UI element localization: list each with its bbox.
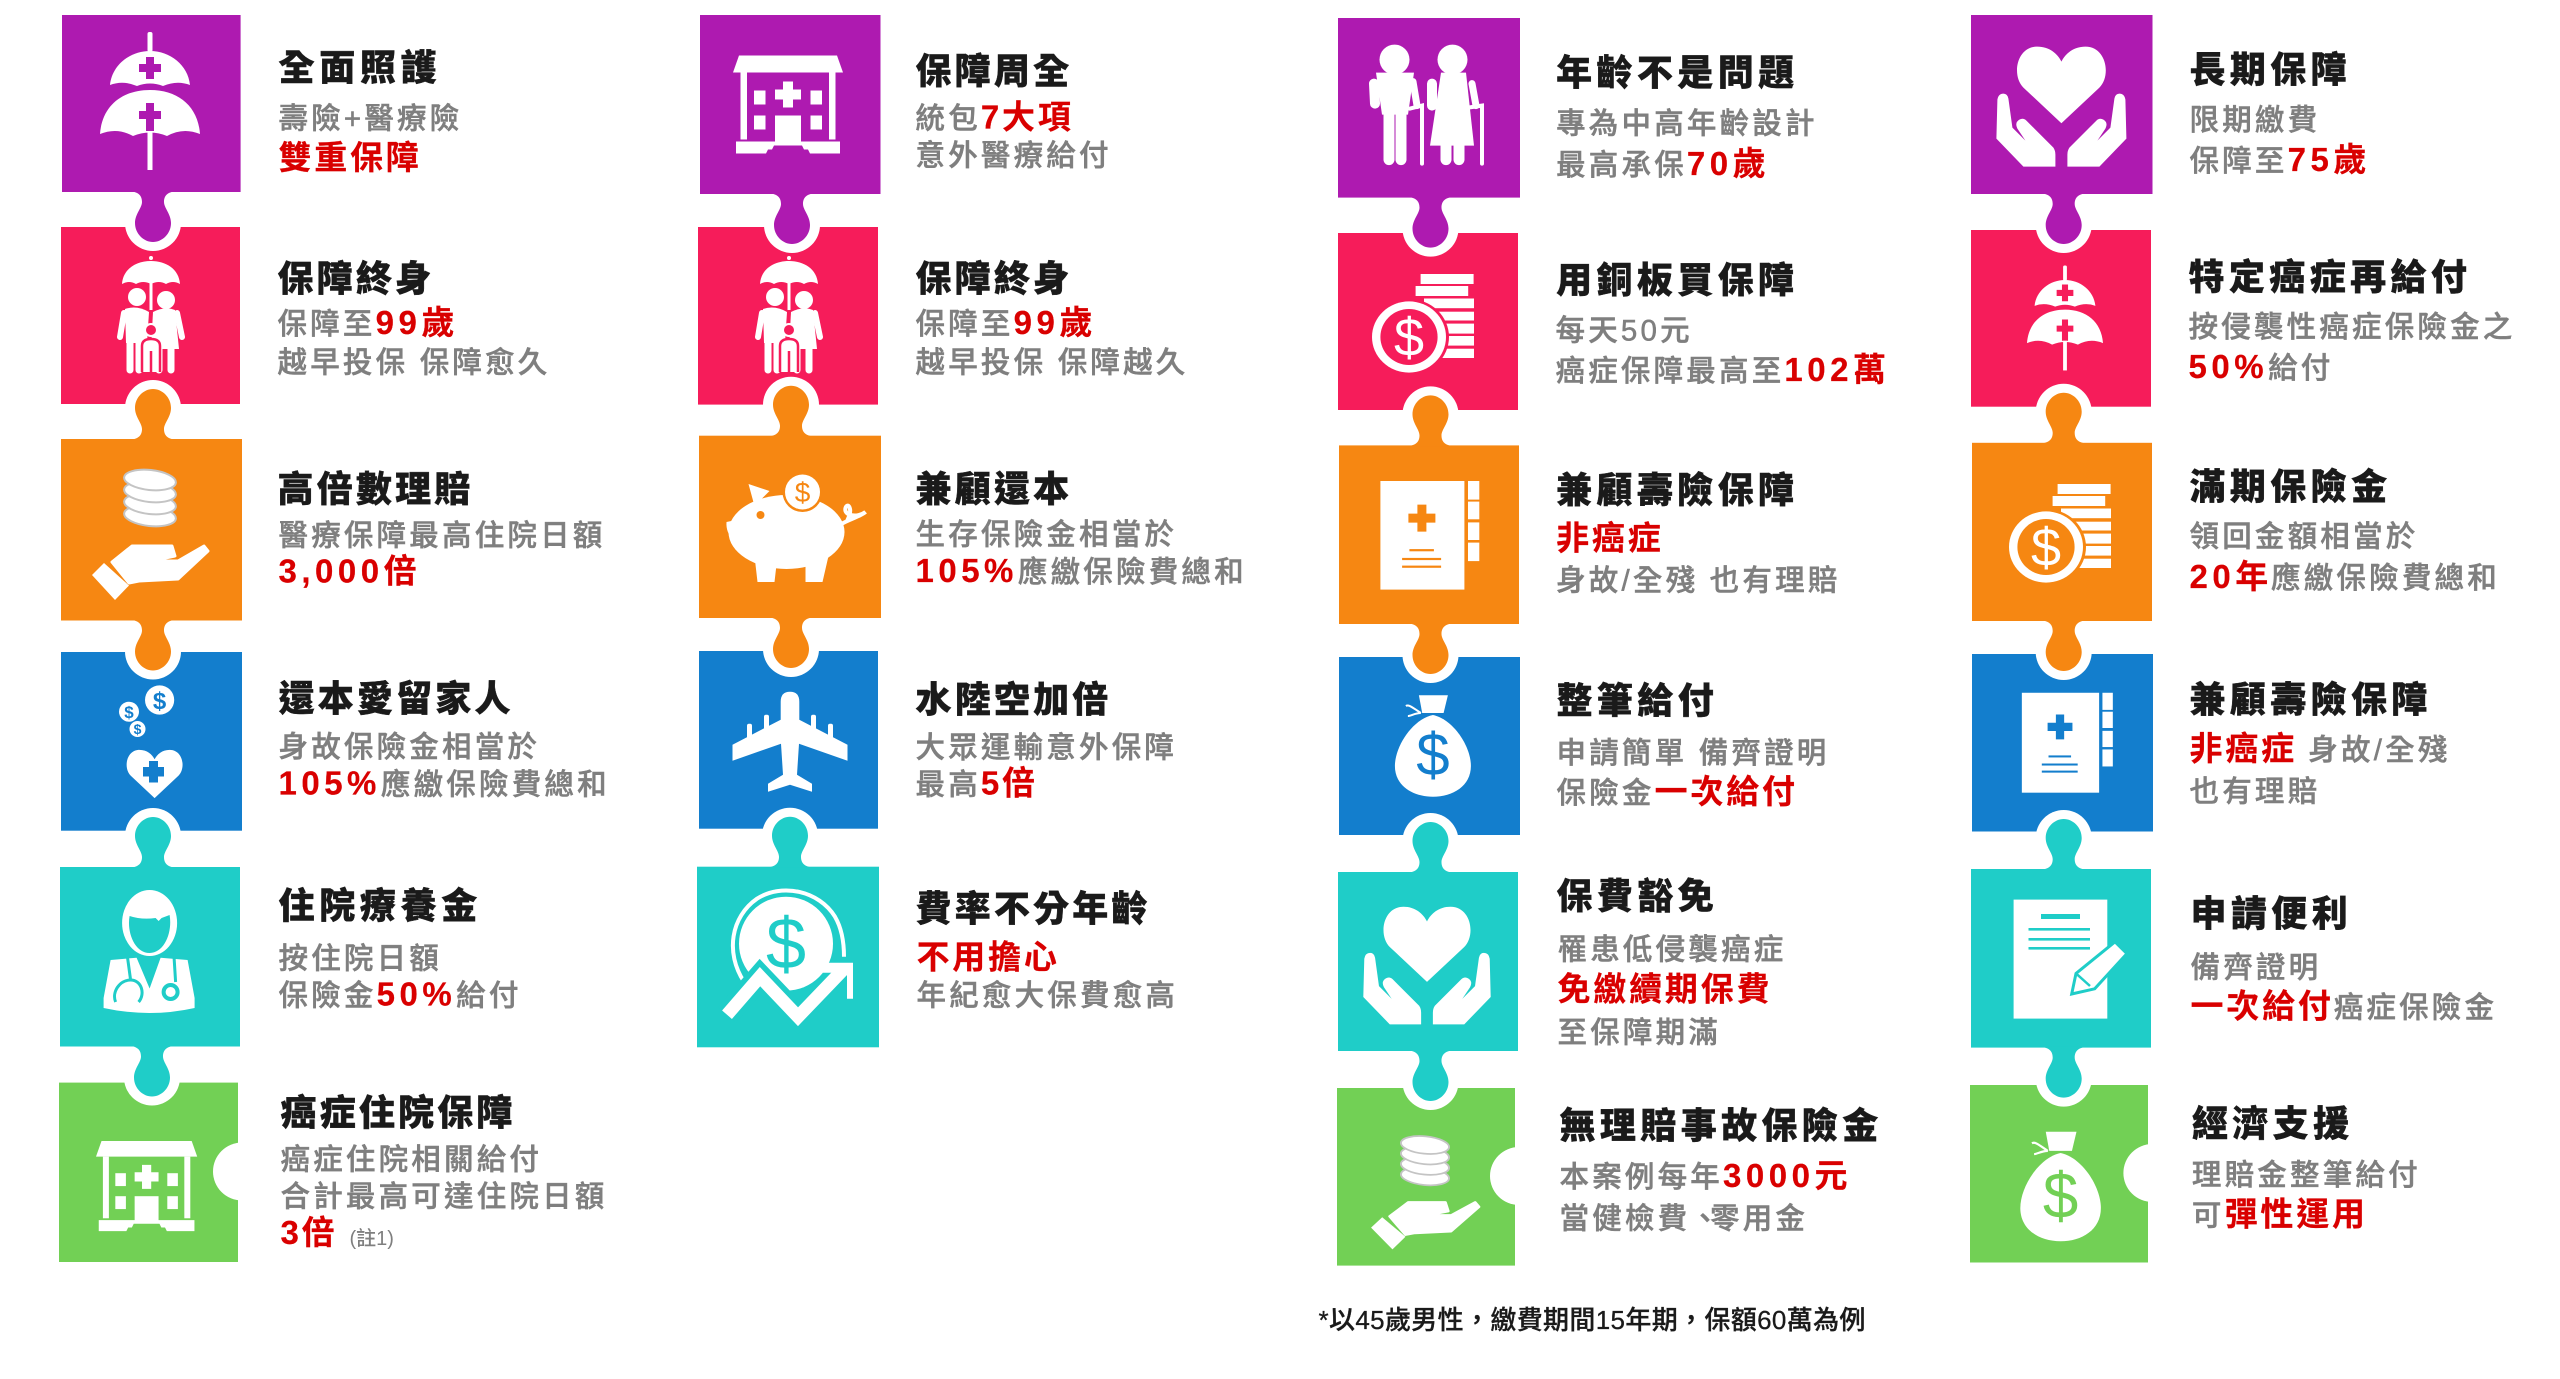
panel: 申請便利: [1971, 869, 2497, 1048]
tile: [1339, 657, 1520, 835]
text block: [278, 304, 550, 380]
tile: [697, 867, 879, 1047]
connector: teal tab up: [1402, 813, 1458, 873]
text block: 保障至99歲: [916, 304, 1095, 341]
icon: hospital: [733, 56, 843, 154]
text block: [2188, 311, 2516, 385]
text block: 保險金50%給付: [278, 976, 522, 1012]
connector: teal tab down: [1402, 1050, 1458, 1110]
heading: 特定癌症再給付: [2188, 256, 2471, 297]
connector: purple tab: [1402, 197, 1458, 257]
connector: purple tab: [764, 193, 820, 253]
heading: 兼顧還本: [916, 469, 1072, 510]
text block: 年紀愈大保費愈高: [916, 980, 1178, 1012]
notch: [1490, 1147, 1548, 1205]
heading: 整筆給付: [1556, 680, 1718, 721]
text block: 限期繳費: [2190, 104, 2320, 137]
panel: 住院療養金: [60, 867, 522, 1046]
text block: (註1): [350, 1227, 394, 1250]
text block: 備齊證明: [2190, 952, 2321, 984]
text block: 105%應繳保險費總和: [278, 764, 610, 802]
tile: [1972, 654, 2153, 832]
icon: airplane: [732, 692, 848, 792]
text block: 免繳續期保費: [1558, 970, 1772, 1008]
text block: [278, 731, 610, 802]
text block: 當健檢費、零用金: [1560, 1202, 1808, 1236]
panel: 還本愛留家人: [61, 652, 610, 831]
text block: 身故保險金相當於: [278, 731, 540, 764]
text block: 105%應繳保險費總和: [916, 552, 1247, 589]
tile: [699, 651, 878, 829]
text block: [2192, 1159, 2421, 1232]
icon: double umbrella: [100, 32, 200, 170]
text block: [278, 520, 606, 590]
tile: [1971, 230, 2151, 407]
panel: 水陸空加倍: [699, 651, 1177, 829]
text block: 罹患低侵襲癌症: [1558, 934, 1786, 966]
text block: [916, 732, 1177, 802]
text block: [2190, 520, 2500, 595]
icon: medical document: [2022, 693, 2113, 793]
text block: [916, 98, 1112, 172]
heading: 全面照護: [278, 47, 441, 88]
connector: orange tab up: [2036, 384, 2092, 444]
text block: 不用擔心: [916, 938, 1060, 976]
connectors column 2: [762, 193, 820, 868]
icon: coin stack with dollar: [2006, 484, 2111, 585]
heading: 住院療養金: [278, 885, 482, 926]
connector: teal tab up: [2036, 810, 2092, 870]
text block: [916, 304, 1188, 380]
notch: [213, 1142, 271, 1200]
tile: [1338, 233, 1518, 410]
heading: 保障終身: [278, 258, 434, 299]
tile: [1971, 15, 2152, 194]
panel: 高倍數理賠: [61, 439, 606, 620]
tile: [61, 652, 242, 831]
text block: 身故/全殘 也有理賠: [1556, 564, 1841, 598]
heading: 保障周全: [916, 50, 1072, 91]
text block: 最高5倍: [916, 764, 1038, 802]
panel: 全面照護: [62, 15, 462, 192]
text block: 按住院日額: [278, 942, 442, 976]
text block: 意外醫療給付: [916, 140, 1112, 172]
text block: 可彈性運用: [2192, 1196, 2368, 1232]
text block: 非癌症 身故/全殘: [2190, 730, 2450, 767]
icon: coins and hand: [92, 467, 208, 600]
heading: 兼顧壽險保障: [1556, 469, 1799, 510]
heading: 費率不分年齡: [916, 888, 1151, 929]
text block: 醫療保障最高住院日額: [278, 520, 606, 552]
connector: teal tab down: [124, 1046, 180, 1106]
text block: 保障至75歲: [2190, 141, 2369, 178]
text block: 生存保險金相當於: [916, 518, 1177, 552]
connectors column 1: [124, 191, 181, 1106]
column 3: [1318, 18, 1889, 1335]
tile: [1970, 1085, 2148, 1262]
text block: 保險金一次給付: [1556, 773, 1798, 810]
heading: 水陸空加倍: [916, 679, 1112, 720]
icon: dollar and rising arrow: $: [766, 905, 806, 985]
connector: purple tab: [2036, 193, 2092, 253]
text block: 至保障期滿: [1558, 1016, 1721, 1050]
icon: double umbrella: [2027, 266, 2103, 370]
tile: [698, 227, 878, 405]
panel: 無理賠事故保險金: [1337, 1088, 1883, 1266]
text block: 癌症住院相關給付: [280, 1144, 542, 1176]
connectors column 4: [2036, 193, 2092, 1107]
icon: money bag: $: [1416, 721, 1450, 788]
text block: 20年應繳保險費總和: [2190, 558, 2500, 595]
footnote: *以45歲男性，繳費期間15年期，保額60萬為例: [1318, 1305, 1866, 1335]
heading: 癌症住院保障: [280, 1092, 516, 1133]
heading: 無理賠事故保險金: [1560, 1105, 1883, 1146]
heading: 兼顧壽險保障: [2190, 679, 2432, 720]
connector: purple tab: [125, 191, 181, 251]
text block: [916, 518, 1247, 589]
text block: 合計最高可達住院日額: [280, 1180, 608, 1214]
panel: 長期保障: [1971, 15, 2369, 194]
panel: 經濟支援: [1970, 1085, 2421, 1262]
connector: orange tab up: [125, 380, 181, 440]
text block: 申請簡單 備齊證明: [1556, 737, 1830, 770]
text block: 50%給付: [2188, 348, 2333, 385]
icon: coins and heart: $: [124, 703, 134, 722]
text block: [280, 1144, 608, 1251]
tile: [1337, 1088, 1515, 1266]
heading: 滿期保險金: [2190, 466, 2392, 507]
heading: 高倍數理賠: [278, 469, 474, 510]
text block: [2190, 952, 2497, 1024]
connector: orange tab down: [125, 620, 181, 680]
column 1: [59, 15, 610, 1262]
panel: 保障終身: [698, 227, 1188, 405]
text block: 3倍: [280, 1214, 337, 1251]
icon: dollar and rising arrow: [727, 890, 853, 1017]
heading: 保費豁免: [1556, 876, 1718, 917]
notch: [2123, 1144, 2181, 1202]
icon: hands and heart: [1996, 47, 2126, 167]
icon: coins and heart: [119, 685, 183, 798]
icon: hospital: [96, 1141, 197, 1231]
tile: [61, 227, 240, 404]
panel: 特定癌症再給付: [1971, 230, 2516, 407]
text block: 大眾運輸意外保障: [916, 732, 1177, 764]
text block: [278, 102, 462, 176]
icon: family under umbrella: [758, 256, 820, 372]
text block: 專為中高年齡設計: [1556, 108, 1818, 140]
icon: form and pencil: [2014, 900, 2127, 1019]
connector: teal tab up: [125, 808, 181, 868]
icon: money bag: $: [2043, 1159, 2078, 1232]
text block: 統包7大項: [916, 98, 1074, 136]
text block: 越早投保 保障愈久: [278, 346, 550, 380]
heading: 保障終身: [916, 258, 1072, 299]
tile: [61, 439, 242, 620]
text block: [2190, 104, 2369, 178]
icon: coin stack with dollar: [1369, 274, 1474, 375]
tile: [1971, 869, 2151, 1048]
icon: coin stack with dollar: $: [1394, 308, 1424, 368]
connector: teal tab up: [762, 808, 818, 868]
text block: [1560, 1157, 1850, 1236]
panel: 費率不分年齡: [697, 867, 1178, 1047]
icon: hands and heart: [1363, 907, 1491, 1024]
icon: family under umbrella: [120, 256, 182, 372]
panel: 年齡不是問題: [1338, 18, 1818, 198]
icon: money bag: [1395, 695, 1471, 797]
text block: 一次給付癌症保險金: [2190, 988, 2497, 1024]
icon: elderly couple: [1374, 45, 1482, 164]
text block: [1558, 934, 1786, 1050]
connector: orange tab up: [763, 377, 819, 437]
text block: [1556, 520, 1841, 598]
text block: 雙重保障: [278, 139, 422, 176]
text block: 非癌症: [1556, 520, 1664, 556]
text block: 3,000倍: [278, 552, 419, 590]
heading: 用銅板買保障: [1556, 260, 1799, 300]
icon: coins and heart: $: [134, 721, 142, 737]
tile: [699, 436, 881, 618]
text block: 理賠金整筆給付: [2192, 1159, 2421, 1192]
text block: [1556, 108, 1818, 182]
heading: 經濟支援: [2192, 1103, 2354, 1144]
panel: 整筆給付: [1339, 657, 1830, 835]
heading: 還本愛留家人: [278, 678, 514, 719]
panel: 兼顧還本: [699, 436, 1247, 618]
text block: [2190, 730, 2450, 808]
panel: 保障周全: [700, 15, 1112, 194]
icon: medical document: [1380, 481, 1479, 590]
text block: 保障至99歲: [278, 304, 457, 341]
text block: [916, 938, 1178, 1012]
text block: 本案例每年3000元: [1560, 1157, 1850, 1194]
tile: [1338, 18, 1520, 198]
panel: 兼顧壽險保障: [1972, 654, 2450, 832]
text block: [1556, 314, 1889, 388]
text block: 壽險+醫療險: [278, 102, 462, 136]
text block: 領回金額相當於: [2190, 520, 2418, 554]
text block: 每天50元: [1556, 314, 1693, 348]
tile: [1338, 872, 1518, 1051]
text block: 癌症保障最高至102萬: [1556, 351, 1889, 388]
icon: doctor: [104, 890, 195, 1013]
panel: 保費豁免: [1338, 872, 1786, 1051]
connector: orange tab down: [763, 617, 819, 677]
heading: 長期保障: [2190, 49, 2351, 90]
text block: 越早投保 保障越久: [916, 346, 1188, 380]
connector: orange tab down: [1402, 623, 1458, 683]
tile: [59, 1083, 238, 1262]
panel: 癌症住院保障: [59, 1083, 608, 1262]
tile: [1972, 443, 2152, 621]
icon: coin stack with dollar: $: [2031, 518, 2061, 578]
icon: coins and heart: $: [153, 688, 167, 715]
text block: [1556, 737, 1830, 810]
text block: [278, 942, 522, 1012]
icon: coins and hand: [1371, 1134, 1479, 1249]
icon: money bag: [2020, 1132, 2101, 1241]
connectors column 3: [1402, 197, 1458, 1110]
connector: orange tab down: [2036, 620, 2092, 680]
heading: 申請便利: [2190, 893, 2352, 934]
column 4: [1970, 15, 2516, 1262]
panel: 兼顧壽險保障: [1339, 445, 1841, 624]
connector: teal tab down: [2036, 1047, 2092, 1107]
panel: 滿期保險金: [1972, 443, 2500, 621]
column 2: [697, 15, 1247, 1047]
heading: 年齡不是問題: [1556, 52, 1799, 93]
tile: [700, 15, 880, 194]
icon: piggy bank: [726, 472, 866, 582]
tile: [1339, 445, 1519, 624]
icon: piggy bank: $: [795, 477, 811, 508]
text block: 最高承保70歲: [1556, 145, 1768, 182]
panel: 用銅板買保障: [1338, 233, 1889, 410]
tile: [60, 867, 240, 1046]
tile: [62, 15, 241, 192]
panel: 保障終身: [61, 227, 550, 404]
connector: orange tab up: [1402, 386, 1458, 446]
text block: 也有理賠: [2190, 776, 2320, 808]
text block: 按侵襲性癌症保險金之: [2188, 311, 2516, 344]
